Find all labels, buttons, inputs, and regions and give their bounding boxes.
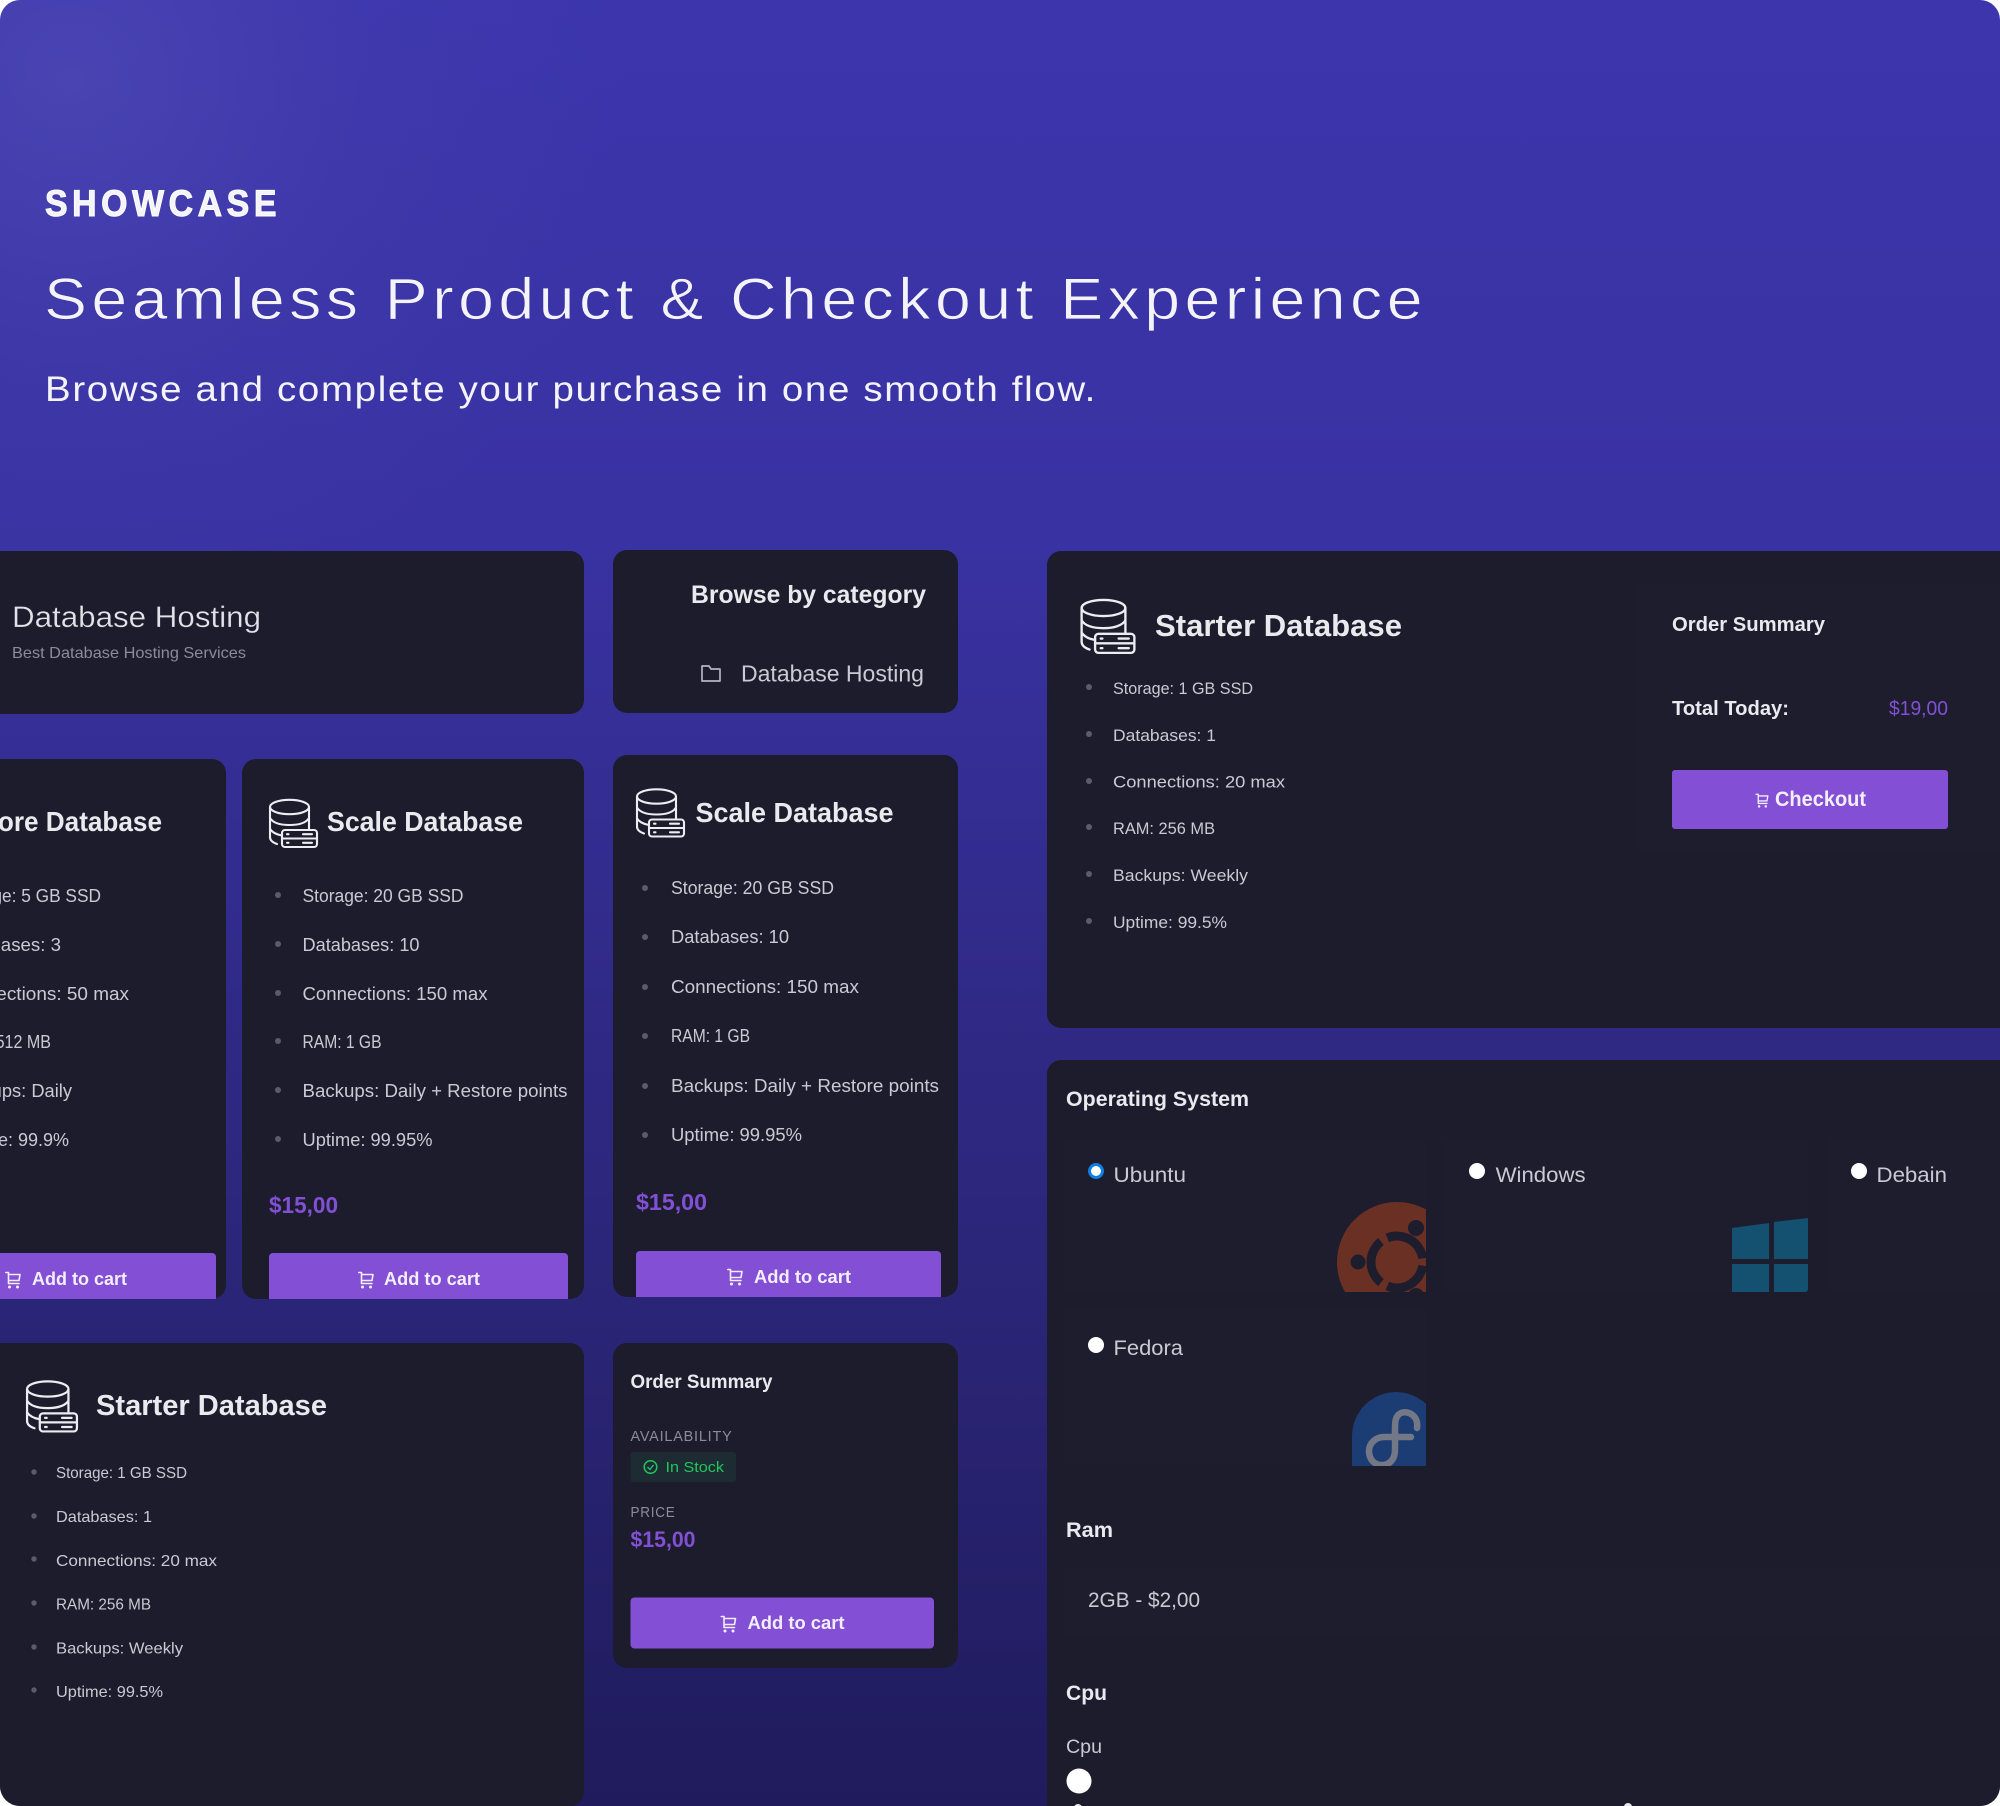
eyebrow: showcase: SHOWCASE xyxy=(45,183,281,224)
feature list: RAM: 256 MB xyxy=(56,1596,151,1614)
card title: Scale Database xyxy=(696,797,894,828)
title: Seamless Product & Checkout Experience xyxy=(44,267,1427,332)
feature list xyxy=(0,886,129,1150)
feature list: Storage: 20 GB SSD xyxy=(302,886,464,906)
feature list: Databases: 10 xyxy=(302,935,420,955)
feature list: Databases: 1 xyxy=(1113,726,1216,745)
feature list: Storage: 20 GB SSD xyxy=(671,878,834,898)
subtitle: Browse and complete your purchase in one smooth flow. xyxy=(45,370,1097,409)
option: fedora xyxy=(1088,1337,1426,1466)
icon: database server xyxy=(1082,600,1134,653)
banner subheading: Best Database Hosting Services xyxy=(12,645,246,662)
icon: database server xyxy=(270,800,317,847)
cpu slider label: Cpu xyxy=(1066,1737,1102,1758)
panel: configuration options xyxy=(1047,1060,2000,1806)
availability label: AVAILABILITY xyxy=(630,1429,732,1445)
feature list: Backups: Daily + Restore points xyxy=(302,1081,568,1101)
total label: Total Today: xyxy=(1672,698,1789,720)
feature list xyxy=(275,886,568,1150)
cpu slider thumb xyxy=(1066,1768,1092,1794)
banner heading: Database Hosting xyxy=(12,601,261,634)
panel: scale database card, sidebar xyxy=(613,755,958,1297)
card title: Scale Database xyxy=(327,806,523,837)
feature list xyxy=(642,878,939,1145)
cpu heading: Cpu xyxy=(1066,1682,1107,1705)
option: fedora: Fedora xyxy=(1114,1337,1183,1360)
panel: order summary with availability xyxy=(613,1343,958,1668)
product title: Starter Database xyxy=(1155,608,1402,643)
add to cart button xyxy=(269,1253,568,1299)
add to cart button xyxy=(630,1598,934,1648)
feature list: Databases: 10 xyxy=(671,927,789,947)
ram select: 2GB - $2,00 xyxy=(1088,1589,1200,1612)
add to cart button xyxy=(636,1251,941,1297)
operating system heading: Operating System xyxy=(1066,1088,1249,1111)
panel: checkout product summary xyxy=(1047,551,2000,1028)
feature list: Backups: Daily + Restore points xyxy=(671,1076,939,1096)
icon: ubuntu logo xyxy=(1337,1202,1426,1292)
summary heading: Order Summary xyxy=(630,1372,773,1393)
panel: core database card xyxy=(0,759,226,1299)
price value: $15,00 xyxy=(630,1527,696,1552)
add to cart button: Add to cart xyxy=(384,1269,480,1289)
feature list: Backups: Weekly xyxy=(1113,866,1249,885)
add to cart button: Add to cart xyxy=(748,1613,844,1633)
icon: fedora logo xyxy=(1352,1392,1426,1466)
price label: PRICE xyxy=(630,1505,676,1521)
feature list: RAM: 256 MB xyxy=(1113,819,1215,838)
feature list: Uptime: 99.5% xyxy=(1113,913,1227,932)
panel: database hosting banner xyxy=(0,551,584,714)
checkout button xyxy=(1672,770,1948,829)
feature list: Uptime: 99.95% xyxy=(671,1125,802,1145)
total value: $19,00 xyxy=(1889,698,1948,720)
icon: database server xyxy=(27,1381,77,1431)
slider tick markers xyxy=(1074,1803,1632,1806)
add to cart button xyxy=(0,1253,216,1299)
feature list: Connections: 20 max xyxy=(56,1553,217,1570)
feature list: Storage: 1 GB SSD xyxy=(1113,679,1253,698)
feature list: Uptime: 99.95% xyxy=(302,1130,432,1150)
ram heading: Ram xyxy=(1066,1519,1113,1542)
icon: folder xyxy=(702,666,720,681)
feature list: Connections: 20 max xyxy=(1113,772,1286,792)
feature list: Backups: Weekly xyxy=(56,1640,183,1658)
feature list: Storage: 1 GB SSD xyxy=(56,1465,187,1482)
summary heading: Order Summary xyxy=(1672,614,1826,636)
feature list: Connections: 150 max xyxy=(671,977,859,997)
panel: starter database detail xyxy=(0,1343,584,1806)
icon: database server xyxy=(637,789,684,836)
option: ubuntu xyxy=(1088,1163,1426,1292)
checkout summary column xyxy=(1637,585,2000,850)
category heading: Browse by category xyxy=(691,581,926,609)
feature list: RAM: 1 GB xyxy=(302,1032,382,1052)
add to cart button: Add to cart xyxy=(754,1267,851,1287)
feature list xyxy=(1086,679,1286,932)
option: windows xyxy=(1444,1138,1809,1292)
option: debain: Debain xyxy=(1876,1164,1947,1187)
feature list: Databases: 1 xyxy=(56,1509,152,1526)
panel: browse by category xyxy=(613,550,958,713)
header block xyxy=(44,183,1427,409)
category link: Database Hosting xyxy=(741,660,924,686)
checkout button: Checkout xyxy=(1775,788,1866,811)
option: debain xyxy=(1827,1138,2000,1292)
in stock badge xyxy=(630,1452,736,1482)
option: ubuntu: Ubuntu xyxy=(1114,1164,1186,1187)
add to cart button: Add to cart xyxy=(32,1269,127,1289)
price: $15,00 xyxy=(269,1192,338,1218)
panel: scale database card xyxy=(242,759,584,1299)
feature list: Uptime: 99.5% xyxy=(56,1684,163,1701)
icon: windows logo xyxy=(1732,1218,1808,1292)
feature list xyxy=(31,1465,217,1701)
ram select xyxy=(1064,1568,2000,1636)
price: $15,00 xyxy=(636,1189,707,1215)
card title: Starter Database xyxy=(96,1390,327,1422)
option: windows: Windows xyxy=(1496,1164,1586,1187)
in stock badge: In Stock xyxy=(666,1459,725,1476)
feature list: RAM: 1 GB xyxy=(671,1026,750,1046)
feature list: Connections: 150 max xyxy=(302,984,488,1004)
